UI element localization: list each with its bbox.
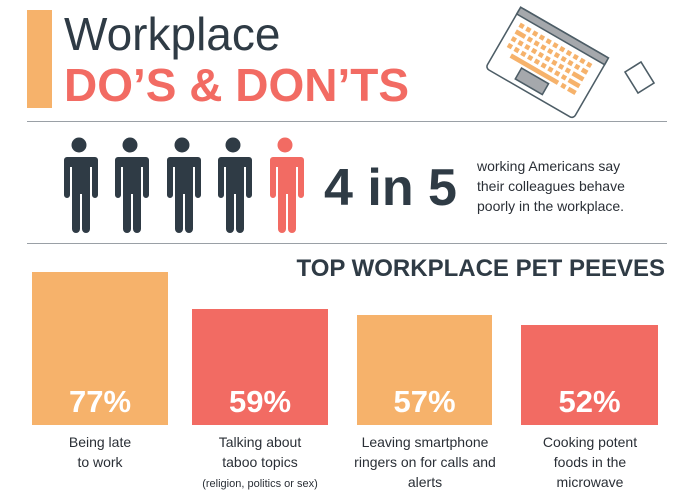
title: DO’S & DON’TS xyxy=(64,59,409,111)
bar 57% xyxy=(357,315,492,425)
bar 77%: 77% xyxy=(69,384,131,419)
bar 59% xyxy=(192,309,328,425)
label 3: Leaving smartphone xyxy=(362,434,488,450)
label 4: foods in the xyxy=(554,454,626,470)
heading: TOP WORKPLACE PET PEEVES xyxy=(296,255,665,282)
label 3: alerts xyxy=(408,474,442,490)
bar chart xyxy=(32,272,658,425)
accent bar xyxy=(27,10,52,108)
label 3: ringers on for calls and xyxy=(354,454,496,470)
bar 57%: 57% xyxy=(393,384,456,419)
label 1: Being late xyxy=(69,434,131,450)
label 3 xyxy=(354,434,496,490)
label 2: Talking about xyxy=(219,434,301,450)
title xyxy=(64,8,409,111)
bar 77% xyxy=(32,272,168,425)
stat text: poorly in the workplace. xyxy=(477,198,624,214)
title: Workplace xyxy=(64,8,280,60)
label 4: microwave xyxy=(557,474,623,490)
label 1 xyxy=(69,434,131,470)
bar 59%: 59% xyxy=(229,384,291,419)
label 1: to work xyxy=(77,454,123,470)
stat text xyxy=(477,158,625,214)
people icons xyxy=(64,138,304,233)
icon: laptop xyxy=(486,6,655,118)
label 4 xyxy=(543,434,638,490)
stat: 4 in 5: 4 in 5 xyxy=(324,159,457,217)
label 2: taboo topics xyxy=(222,454,298,470)
stat text: their colleagues behave xyxy=(477,178,625,194)
bar 52%: 52% xyxy=(558,384,621,419)
label 2 xyxy=(202,434,318,490)
divider xyxy=(27,121,667,122)
label 4: Cooking potent xyxy=(543,434,637,450)
stat text: working Americans say xyxy=(477,158,620,174)
bar 52% xyxy=(521,325,658,425)
label 2: (religion, politics or sex) xyxy=(202,478,318,490)
